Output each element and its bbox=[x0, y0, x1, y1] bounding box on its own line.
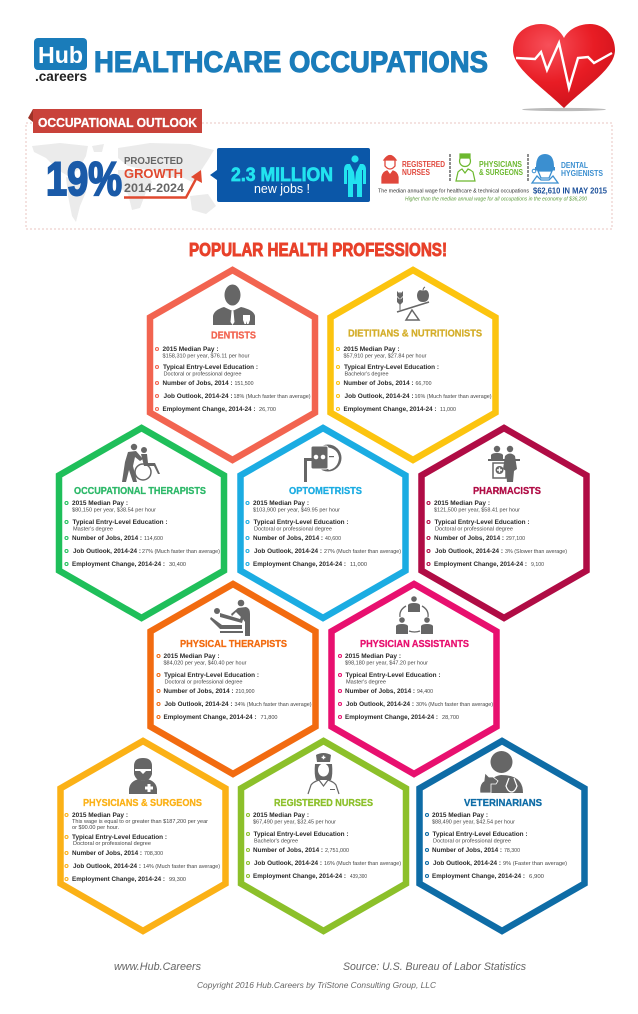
details: Doctoral or professional degree bbox=[433, 838, 511, 844]
callout: 2.3 million new jobs: 2.3 MILLION bbox=[231, 165, 333, 186]
details: Job Outlook, 2014-24 : bbox=[164, 701, 232, 708]
details: 9,100 bbox=[531, 562, 544, 568]
details: 2015 Median Pay : bbox=[72, 812, 128, 819]
logo: Hub.careers bbox=[34, 38, 87, 84]
logo: Hub.careers: .careers bbox=[35, 68, 87, 84]
details: 2015 Median Pay : bbox=[345, 653, 401, 660]
label: registered nurses: NURSES bbox=[402, 168, 431, 177]
label: dental hygienists: HYGIENISTS bbox=[561, 169, 604, 178]
icon: therapist and patient bbox=[210, 600, 250, 636]
details: $121,500 per year, $58.41 per hour bbox=[434, 508, 520, 514]
details: Job Outlook, 2014-24 : bbox=[433, 860, 501, 867]
footer: website: www.Hub.Careers bbox=[114, 961, 201, 973]
details: Typical Entry-Level Education : bbox=[432, 831, 528, 838]
details: $84,020 per year, $40.40 per hour bbox=[164, 660, 247, 666]
details: Bachelor's degree bbox=[344, 372, 389, 378]
world map bbox=[32, 143, 216, 222]
details: Typical Entry-Level Education : bbox=[346, 672, 440, 679]
footer: copyright: Copyright 2016 Hub.Careers by TriStone Consulting Group, LLC bbox=[197, 981, 436, 990]
icon: man with briefcase bbox=[344, 155, 366, 197]
details: 114,600 bbox=[144, 536, 163, 542]
logo: Hub.careers: Hub bbox=[38, 42, 83, 68]
details bbox=[65, 812, 220, 883]
title: OPTOMETRISTS bbox=[289, 485, 362, 497]
details: Job Outlook, 2014-24 : bbox=[344, 393, 414, 400]
details: Number of Jobs, 2014 : bbox=[434, 535, 504, 542]
details: 2015 Median Pay : bbox=[253, 500, 309, 507]
text: wage figure: $62,610 IN MAY 2015 bbox=[533, 186, 608, 196]
details: Master's degree bbox=[73, 526, 113, 532]
details: Doctoral or professional degree bbox=[164, 680, 243, 686]
heading: popular health professions: POPULAR HEALTH PROFESSIONS! bbox=[189, 240, 447, 260]
arrow: growth bbox=[124, 170, 202, 198]
projected growth label: PROJECTED bbox=[124, 155, 183, 167]
panel: pharmacists bbox=[422, 428, 586, 618]
text: median annual wage: The median annual wage for healthcare & technical occupations bbox=[378, 189, 529, 195]
details bbox=[246, 812, 401, 880]
details: 2015 Median Pay : bbox=[253, 812, 309, 819]
icon: dentist bbox=[213, 284, 255, 325]
label: registered nurses: REGISTERED bbox=[402, 160, 445, 169]
details: Number of Jobs, 2014 : bbox=[253, 847, 323, 854]
details: Job Outlook, 2014-24 : bbox=[435, 548, 503, 555]
details: 26,700 bbox=[259, 407, 276, 413]
details: Job Outlook, 2014-24 : bbox=[73, 548, 141, 555]
details: Doctoral or professional degree bbox=[435, 526, 513, 532]
details: 708,300 bbox=[144, 851, 163, 857]
details: $67,490 per year, $32.45 per hour bbox=[253, 820, 336, 826]
details: Number of Jobs, 2014 : bbox=[345, 688, 415, 695]
title: PHYSICIANS & SURGEONS bbox=[83, 797, 202, 809]
panel: optometrists bbox=[240, 428, 406, 618]
details bbox=[336, 346, 492, 413]
details bbox=[65, 500, 220, 568]
details: Number of Jobs, 2014 : bbox=[344, 380, 414, 387]
label: physicians and surgeons: & SURGEONS bbox=[479, 168, 524, 177]
details: 78,300 bbox=[504, 848, 520, 854]
details: 6,900 bbox=[529, 874, 544, 880]
panel: occupational therapists bbox=[59, 428, 224, 618]
icon: heart with pulse bbox=[513, 24, 615, 111]
details: 2015 Median Pay : bbox=[164, 653, 220, 660]
details bbox=[157, 653, 312, 721]
details bbox=[427, 500, 567, 568]
details: Doctoral or professional degree bbox=[254, 526, 332, 532]
details: 27% (Much faster than average) bbox=[324, 549, 401, 555]
details: Job Outlook, 2014-24 : bbox=[346, 701, 414, 708]
title: PHARMACISTS bbox=[473, 485, 541, 497]
details: Typical Entry-Level Education : bbox=[164, 672, 259, 679]
details: Employment Change, 2014-24 : bbox=[72, 876, 165, 883]
icon: surgeon bbox=[129, 758, 157, 794]
details: $88,490 per year, $42.54 per hour bbox=[432, 820, 515, 826]
title: HEALTHCARE OCCUPATIONS bbox=[94, 46, 488, 79]
details: Typical Entry-Level Education : bbox=[163, 364, 258, 371]
details: 16% (Much faster than average) bbox=[324, 861, 401, 867]
details: Job Outlook, 2014-24 : bbox=[254, 548, 322, 555]
panel: physicians and surgeons bbox=[60, 741, 226, 931]
details: 9% (Faster than average) bbox=[503, 861, 567, 867]
details: 2015 Median Pay : bbox=[72, 500, 128, 507]
icon: scale with wheat and apple bbox=[397, 287, 429, 320]
title: DIETITIANS & NUTRITIONISTS bbox=[348, 328, 482, 340]
details: Doctoral or professional degree bbox=[73, 841, 151, 847]
details: Typical Entry-Level Education : bbox=[344, 364, 439, 371]
details: Number of Jobs, 2014 : bbox=[432, 847, 502, 854]
details: Number of Jobs, 2014 : bbox=[162, 380, 232, 387]
details: Employment Change, 2014-24 : bbox=[344, 406, 436, 413]
details: 2015 Median Pay : bbox=[162, 346, 218, 353]
panel: dietitians and nutritionists bbox=[330, 270, 496, 460]
details: Employment Change, 2014-24 : bbox=[162, 406, 256, 413]
banner: occupational outlook: OCCUPATIONAL OUTLOOK bbox=[38, 115, 198, 130]
details: 99,300 bbox=[169, 877, 186, 883]
details: 40,600 bbox=[325, 536, 341, 542]
label: dental hygienists bbox=[561, 161, 604, 178]
projected growth label: GROWTH bbox=[124, 166, 183, 181]
icon: therapist with wheelchair bbox=[122, 444, 160, 482]
details: Master's degree bbox=[346, 680, 386, 686]
details: 16% (Much faster than average) bbox=[414, 394, 492, 400]
details: $57,910 per year, $27.84 per hour bbox=[344, 354, 427, 360]
details: 210,900 bbox=[236, 689, 255, 695]
details: 2015 Median Pay : bbox=[434, 500, 490, 507]
details: 2015 Median Pay : bbox=[344, 346, 400, 353]
details bbox=[156, 346, 311, 413]
details: Number of Jobs, 2014 : bbox=[164, 688, 234, 695]
panel: occupational outlook bbox=[26, 123, 612, 229]
panel: physical therapists bbox=[150, 584, 316, 774]
icon: pharmacy counter bbox=[488, 446, 520, 482]
details: Typical Entry-Level Education : bbox=[434, 519, 530, 526]
panel: physician assistants bbox=[332, 584, 496, 774]
details: 18% (Much faster than average) bbox=[234, 394, 311, 400]
details: Number of Jobs, 2014 : bbox=[72, 535, 142, 542]
details: $103,900 per year, $49.95 per hour bbox=[253, 508, 340, 514]
details: Bachelor's degree bbox=[254, 838, 298, 844]
label: registered nurses bbox=[402, 160, 445, 177]
details: Typical Entry-Level Education : bbox=[254, 831, 348, 838]
icon: nurse bbox=[308, 753, 339, 794]
details bbox=[338, 653, 493, 721]
panel: registered nurses bbox=[241, 741, 406, 931]
details: $80,150 per year, $38.54 per hour bbox=[72, 508, 156, 514]
details: This wage is equal to or greater than $187,200 per year bbox=[72, 819, 208, 825]
details: 30% (Much faster than average) bbox=[416, 702, 493, 708]
details bbox=[426, 812, 567, 880]
details: $158,310 per year, $76.11 per hour bbox=[162, 354, 250, 360]
details: 30,400 bbox=[169, 562, 186, 568]
details: 14% (Much faster than average) bbox=[143, 864, 220, 870]
icon: registered nurse bbox=[382, 156, 398, 183]
title: DENTISTS bbox=[211, 330, 256, 342]
details: Employment Change, 2014-24 : bbox=[434, 561, 527, 568]
title: PHYSICAL THERAPISTS bbox=[180, 638, 287, 650]
details: 66,700 bbox=[416, 381, 432, 387]
title: REGISTERED NURSES bbox=[274, 797, 373, 809]
callout: 2.3 million new jobs bbox=[210, 148, 370, 202]
icon: phoropter and face bbox=[304, 444, 342, 482]
details: 11,000 bbox=[350, 562, 367, 568]
icon: vet and dog bbox=[480, 751, 523, 793]
details: $98,180 per year, $47.20 per hour bbox=[345, 660, 428, 666]
details: Employment Change, 2014-24 : bbox=[164, 714, 256, 721]
details: Employment Change, 2014-24 : bbox=[253, 561, 346, 568]
details: 2,751,000 bbox=[325, 848, 349, 854]
footer: source: Source: U.S. Bureau of Labor Statistics bbox=[343, 961, 526, 973]
statistic: 19 percent: 19% bbox=[46, 152, 122, 205]
title: OCCUPATIONAL THERAPISTS bbox=[74, 485, 206, 497]
details: Number of Jobs, 2014 : bbox=[72, 850, 142, 857]
projected growth label: 2014-2024 bbox=[124, 183, 185, 195]
details: 34% (Much faster than average) bbox=[234, 702, 312, 708]
details: Typical Entry-Level Education : bbox=[72, 519, 168, 526]
text: higher than median: Higher than the median annual wage for all occupations in the economy of $36,200 bbox=[405, 196, 587, 202]
label: physicians and surgeons: PHYSICIANS bbox=[479, 160, 523, 169]
details: Employment Change, 2014-24 : bbox=[253, 873, 346, 880]
callout: 2.3 million new jobs: new jobs ! bbox=[254, 182, 310, 196]
details bbox=[246, 500, 401, 568]
details: 27% (Much faster than average) bbox=[142, 549, 220, 555]
details: Employment Change, 2014-24 : bbox=[345, 714, 438, 721]
details: or $90.00 per hour. bbox=[72, 825, 119, 831]
details: Employment Change, 2014-24 : bbox=[72, 561, 165, 568]
projected growth label bbox=[124, 155, 185, 195]
details: Typical Entry-Level Education : bbox=[254, 519, 348, 526]
title: PHYSICIAN ASSISTANTS bbox=[360, 638, 469, 650]
details: 71,800 bbox=[260, 715, 278, 721]
details: 94,400 bbox=[417, 689, 433, 695]
details: 2015 Median Pay : bbox=[432, 812, 488, 819]
details: Job Outlook, 2014-24 : bbox=[254, 860, 322, 867]
icon: physician bbox=[456, 154, 475, 181]
icon: dental hygienist bbox=[532, 154, 558, 183]
banner: occupational outlook bbox=[28, 109, 202, 133]
icon: team of three bbox=[396, 596, 433, 634]
panel: dentists bbox=[150, 270, 315, 460]
details: 297,100 bbox=[506, 536, 525, 542]
details: Number of Jobs, 2014 : bbox=[253, 535, 323, 542]
details: 151,500 bbox=[234, 381, 254, 387]
details: 28,700 bbox=[442, 715, 459, 721]
label: dental hygienists: DENTAL bbox=[561, 161, 588, 170]
panel: veterinarians bbox=[420, 741, 584, 931]
title: VETERINARIANS bbox=[464, 797, 542, 809]
details: 439,300 bbox=[350, 874, 367, 880]
details: Job Outlook, 2014-24 : bbox=[164, 393, 232, 400]
details: Typical Entry-Level Education : bbox=[72, 834, 167, 841]
details: 3% (Slower than average) bbox=[505, 549, 567, 555]
label: physicians and surgeons bbox=[479, 160, 524, 177]
details: 11,000 bbox=[440, 407, 456, 413]
details: Employment Change, 2014-24 : bbox=[432, 873, 525, 880]
details: Doctoral or professional degree bbox=[164, 372, 242, 378]
details: Job Outlook, 2014-24 : bbox=[73, 863, 141, 870]
